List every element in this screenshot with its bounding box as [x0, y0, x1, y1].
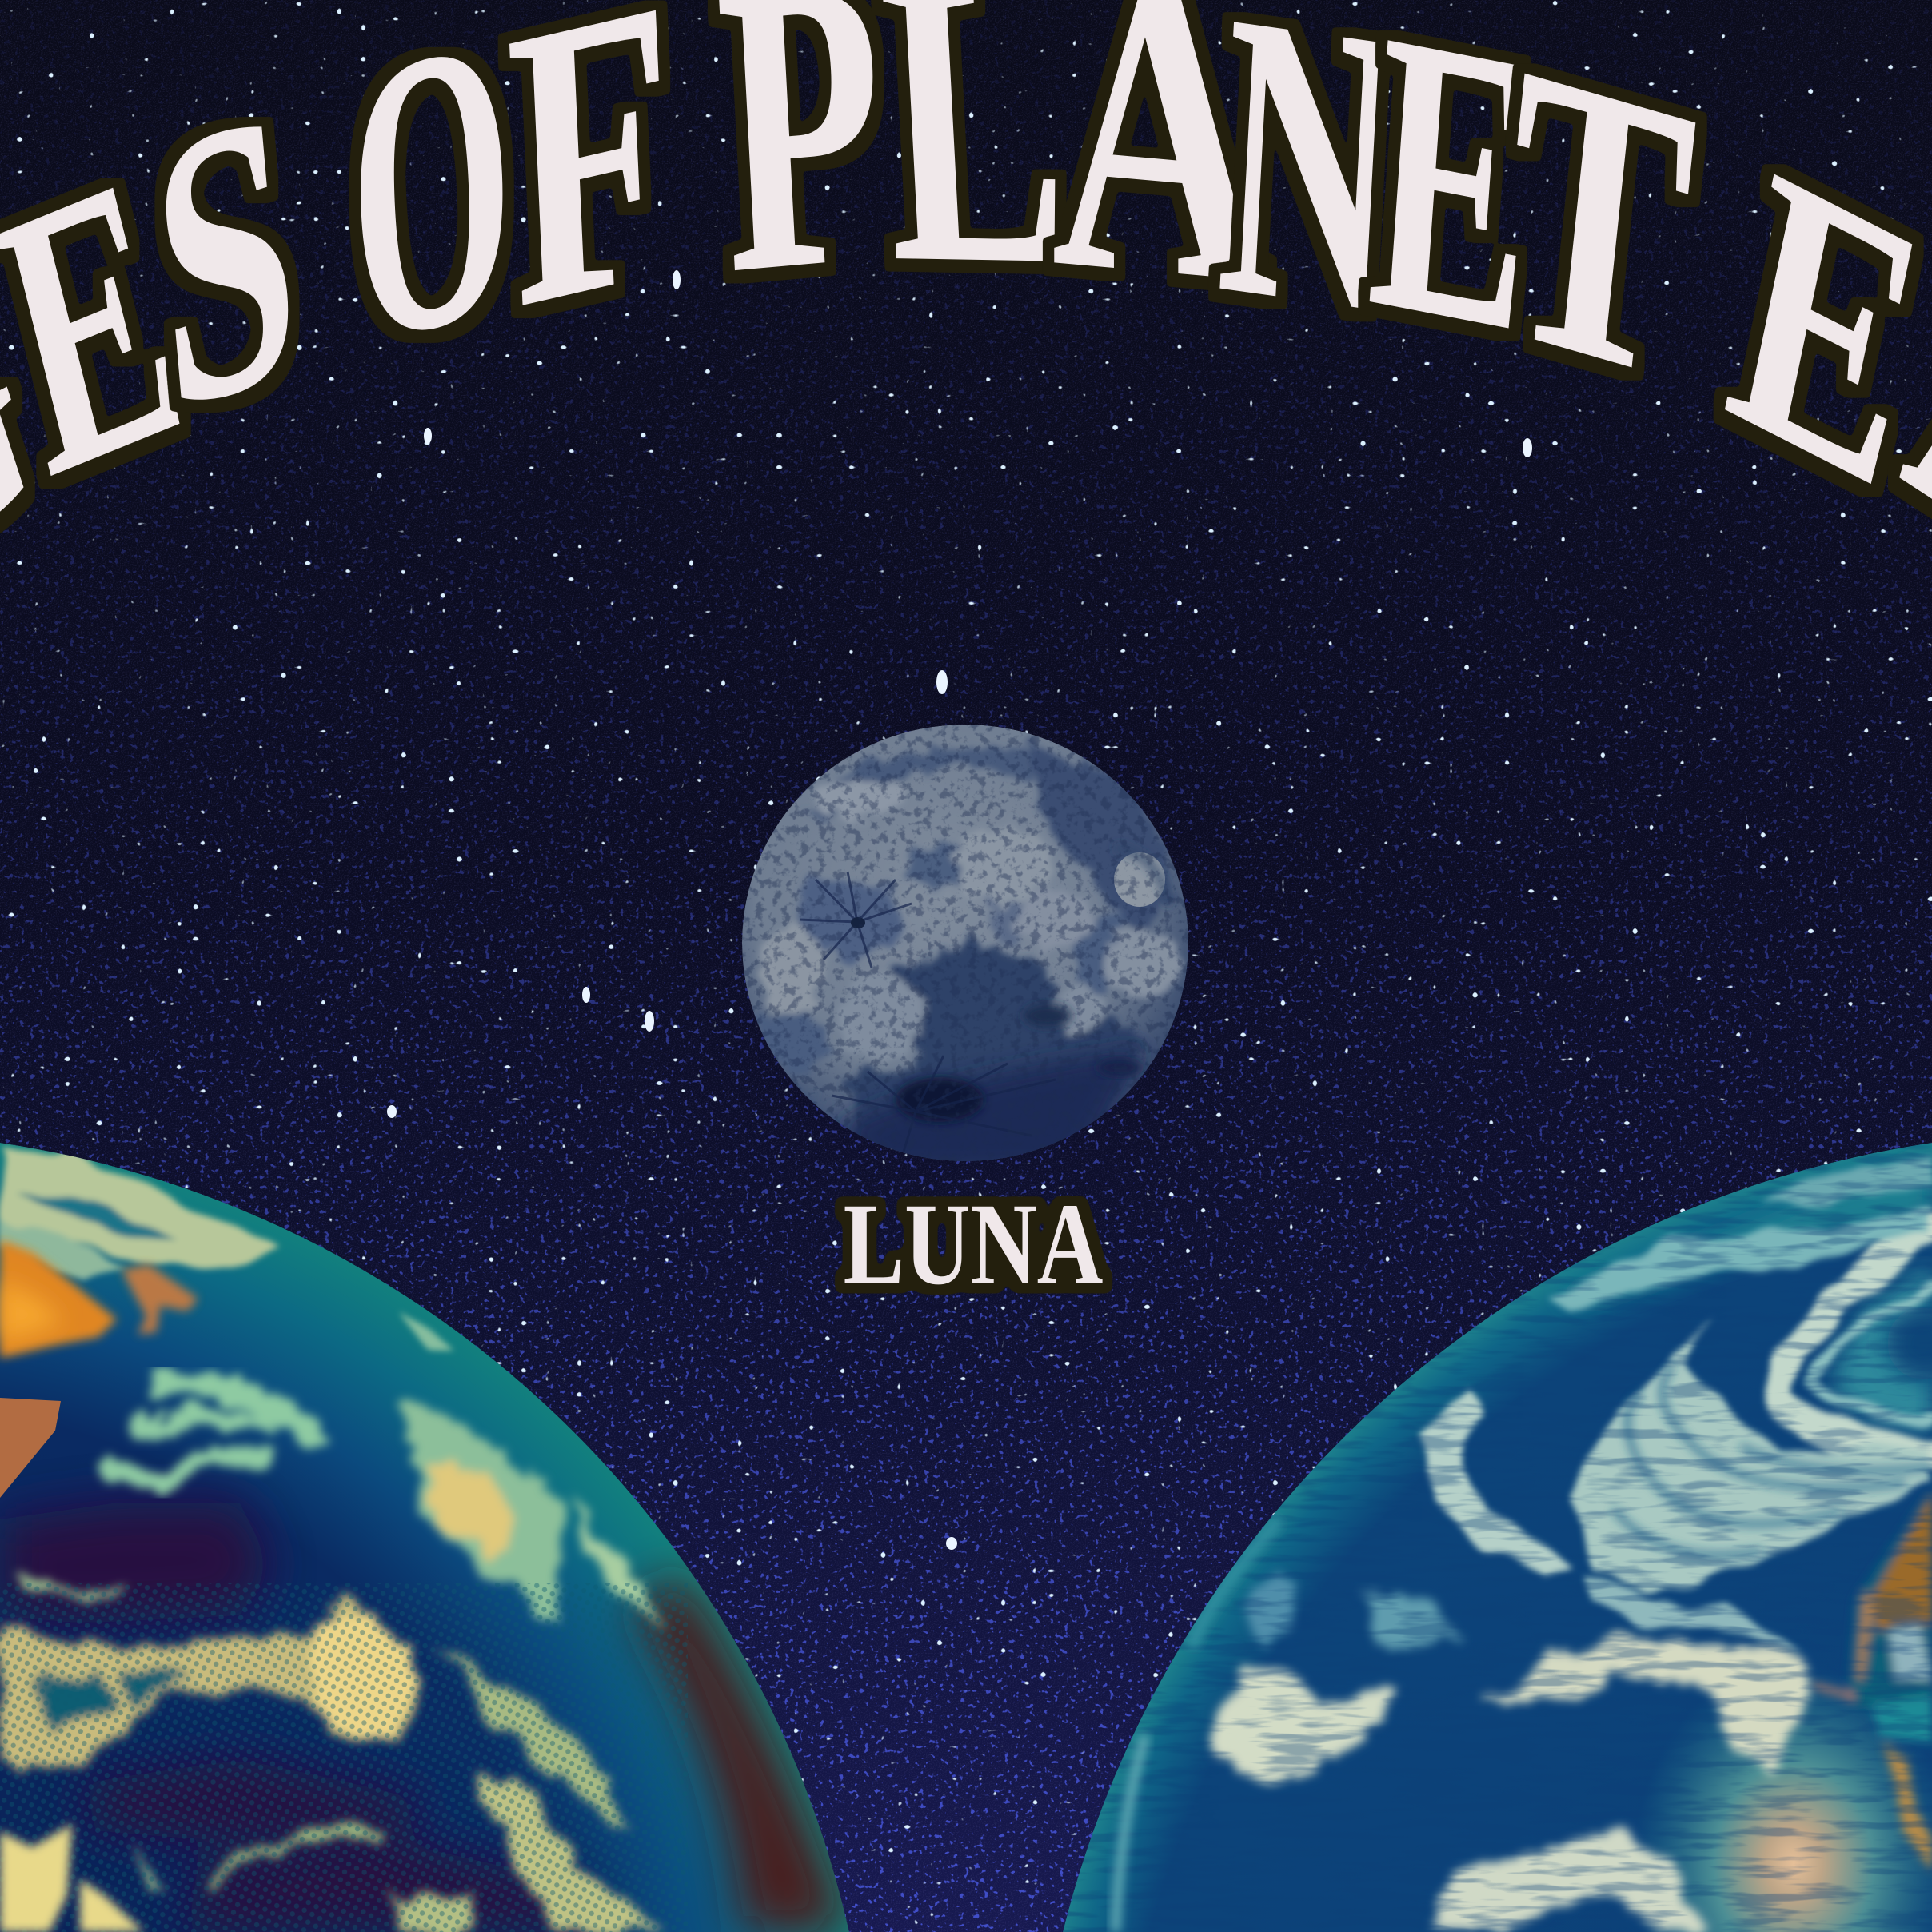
moon — [736, 720, 1200, 1176]
left Earth — [0, 1143, 849, 1932]
lower cloud bands — [0, 1575, 664, 1932]
crater rays — [800, 872, 1056, 1152]
letter S: S — [139, 23, 312, 495]
fan streaks — [1615, 1367, 1932, 1555]
polar clouds — [0, 1145, 456, 1351]
large yellow cloud — [402, 1401, 667, 1631]
title: arched lettering — [0, 0, 1932, 681]
upper teal zone — [1559, 1152, 1932, 1303]
brown land wedge — [0, 1398, 61, 1498]
cloud fan — [1419, 1152, 1932, 1647]
small island — [122, 1264, 198, 1335]
swirl cloud — [108, 1387, 312, 1479]
label: LUNA: LUNA — [844, 1180, 1103, 1309]
bottom crater shadow — [840, 1048, 1144, 1176]
night patches — [0, 1503, 608, 1932]
right Earth — [1040, 1120, 1932, 1932]
cloud streak texture — [1040, 1120, 1932, 1932]
yellow land — [0, 1824, 72, 1932]
lower clouds — [1212, 1567, 1805, 1932]
sunglint — [1634, 1663, 1932, 1932]
swirl centre — [1831, 1263, 1932, 1431]
mare patches — [848, 940, 1144, 1176]
orange land — [0, 1239, 117, 1358]
red limb — [632, 1575, 849, 1932]
continents — [1810, 1487, 1932, 1871]
cloud swirl — [1779, 1227, 1932, 1451]
limb highlight — [1116, 1735, 1145, 1932]
